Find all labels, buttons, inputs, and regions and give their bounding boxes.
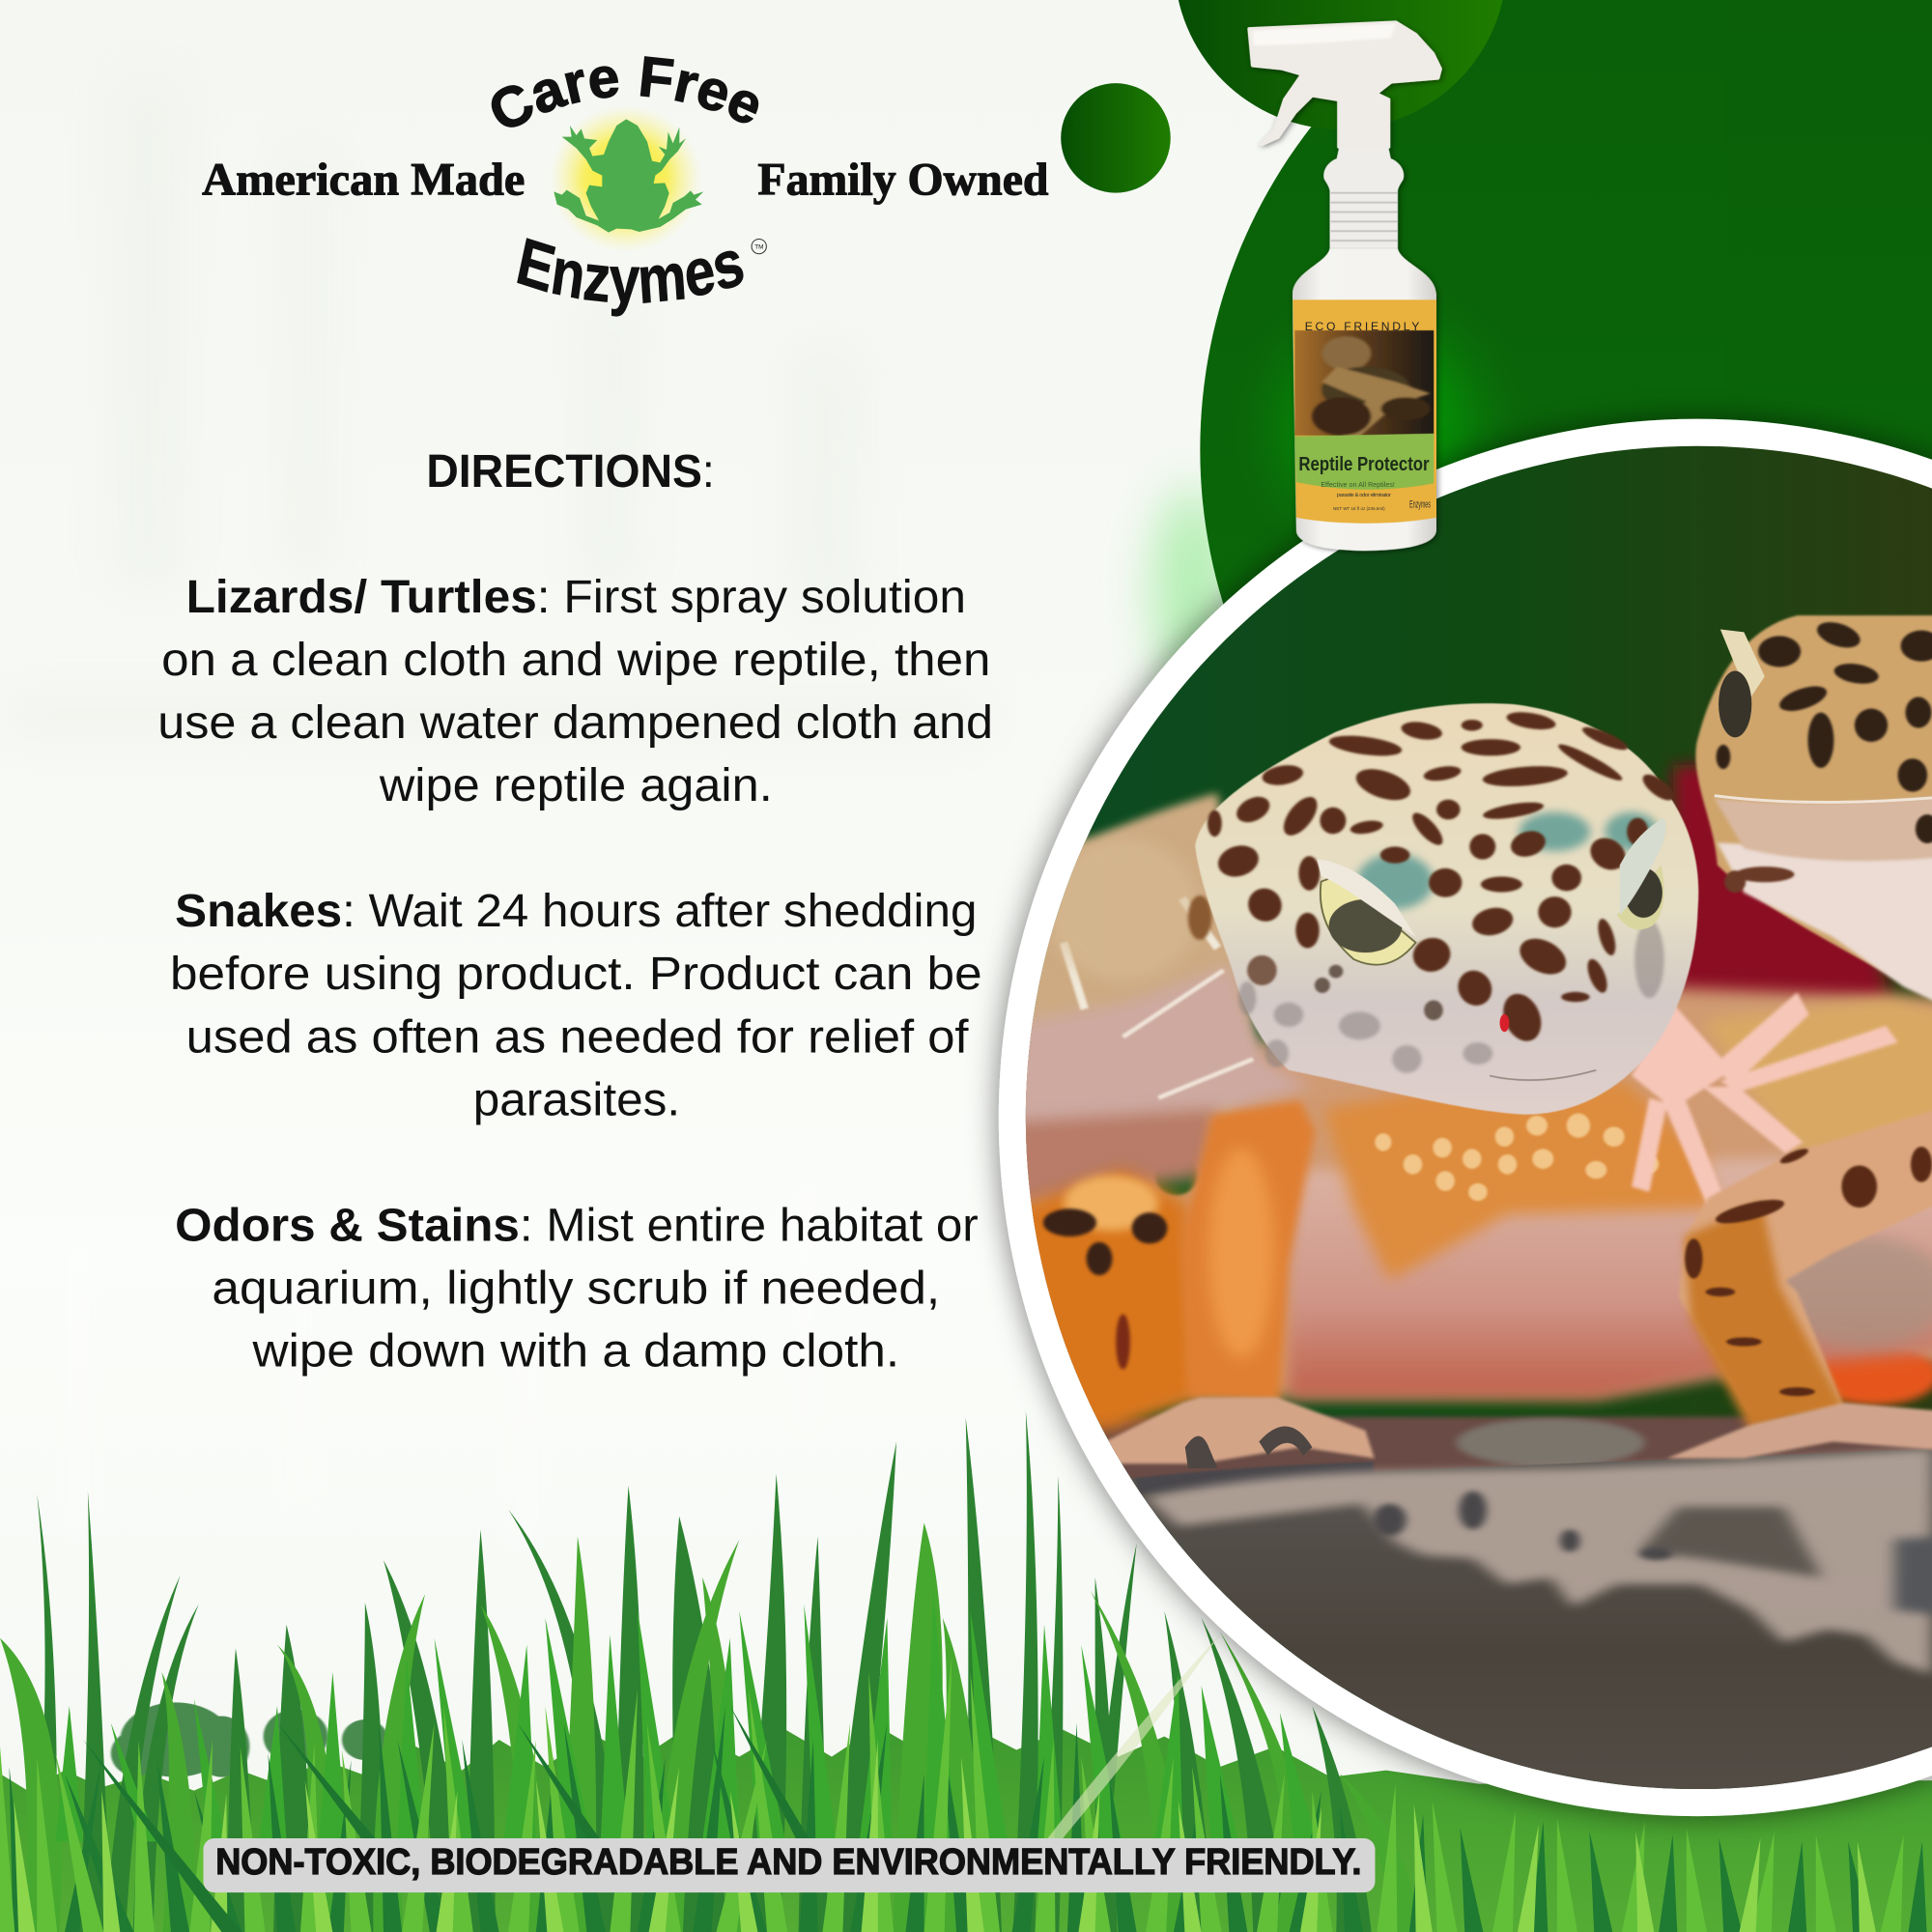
label: reptile protector: Reptile Protector bbox=[1298, 454, 1430, 475]
front left leg bbox=[1105, 1100, 1375, 1468]
second gecko head bbox=[1695, 615, 1932, 1020]
green glow near bottle bbox=[1226, 271, 1534, 579]
mid blades bbox=[0, 1523, 1417, 1932]
small green gap bbox=[1155, 1155, 1198, 1196]
gecko belly bbox=[1289, 1153, 1932, 1397]
icon: green frog bbox=[554, 119, 703, 233]
callout text: NON-TOXIC, BIODEGRADABLE AND ENVIRONMENTALLY FRIENDLY. bbox=[215, 1841, 1361, 1883]
diagonal dark leaves bbox=[83, 1706, 841, 1932]
text: American Made: American Made bbox=[202, 156, 525, 206]
green curved background shape bbox=[1200, 0, 1932, 985]
text: snakes: parasites. bbox=[473, 1073, 680, 1125]
text: snakes: Snakes: Wait 24 hours after shedding bbox=[175, 885, 977, 937]
trademark mark: TM bbox=[754, 244, 763, 251]
main gecko head bbox=[1195, 703, 1698, 1115]
label: eco friendly: ECO FRIENDLY bbox=[1305, 320, 1419, 333]
label: net weight: NET WT 16 fl oz (236.5ml) bbox=[1333, 506, 1385, 511]
text: odors and stains: wipe down with a damp cloth. bbox=[251, 1325, 899, 1378]
logo yellow glow bbox=[550, 104, 702, 252]
heading: directions: DIRECTIONS: bbox=[426, 445, 715, 497]
label: parasite and odor eliminator: parasite & odor eliminator bbox=[1337, 493, 1391, 498]
pale foreground leaf bbox=[1047, 1636, 1219, 1838]
product: spray bottle bbox=[1249, 22, 1440, 551]
text: odors and stains: aquarium, lightly scrub if needed, bbox=[212, 1262, 940, 1314]
lime blades bbox=[14, 1740, 1876, 1932]
label: effective on all reptiles: Effective on All Reptiles! bbox=[1321, 482, 1395, 489]
mouth and nostril bbox=[1490, 1070, 1596, 1080]
text: lizards and turtles: on a clean cloth and wipe reptile, then bbox=[161, 634, 991, 686]
bottle body bbox=[1293, 248, 1436, 551]
photo: leopard geckos on rock bbox=[1026, 446, 1932, 1789]
trademark mark bbox=[752, 239, 766, 254]
head teal markings bbox=[1356, 812, 1659, 909]
logo: Care Free Enzymes bbox=[491, 56, 767, 317]
dark streak blades bbox=[10, 1706, 1927, 1932]
bottle collar bbox=[1323, 147, 1404, 248]
text: snakes: used as often as needed for relief of bbox=[186, 1010, 969, 1063]
head lower grey mottling bbox=[1238, 921, 1664, 1073]
bottle label bbox=[1293, 299, 1436, 524]
back blades bbox=[32, 1411, 1372, 1932]
red backdrop bbox=[1673, 765, 1891, 1009]
bottle neck ribs bbox=[1331, 193, 1398, 241]
glow behind green shape bbox=[1153, 487, 1233, 696]
right flank spots bbox=[1703, 998, 1932, 1153]
head brown spots bbox=[1208, 709, 1678, 1046]
rock body bbox=[1035, 1449, 1932, 1855]
bright blades bbox=[0, 1655, 1904, 1932]
bottle trigger head bbox=[1249, 22, 1440, 147]
left eye bbox=[1317, 860, 1416, 965]
rock bbox=[1035, 1417, 1932, 1855]
white ring around photo bbox=[999, 419, 1932, 1816]
infographic canvas: Enzymes bbox=[1409, 499, 1431, 511]
small green circle bbox=[1061, 83, 1171, 193]
slender upper blades bbox=[55, 1591, 1317, 1841]
grass base bbox=[0, 1726, 1932, 1932]
top green circle bbox=[1175, 0, 1507, 129]
dark speckled stone bbox=[1135, 1462, 1373, 1494]
text: lizards and turtles bbox=[157, 571, 993, 811]
rock light crust bbox=[1146, 1449, 1932, 1674]
logo text: Care Free bbox=[502, 96, 777, 140]
text: Family Owned: Family Owned bbox=[757, 156, 1048, 206]
text: snakes: before using product. Product can be bbox=[170, 948, 982, 1000]
gecko body left bbox=[969, 793, 1312, 1214]
spotted orange back bbox=[1324, 1081, 1715, 1281]
label green band bbox=[1294, 434, 1434, 490]
logo: Care Free Enzymes: Care Free bbox=[491, 56, 759, 128]
callout: eco claim pill bbox=[203, 1838, 1375, 1892]
distant trees bbox=[111, 1702, 388, 1777]
text: lizards and turtles: wipe reptile again. bbox=[379, 759, 773, 811]
directions text block bbox=[157, 445, 993, 1378]
text: odors and stains: Odors & Stains: Mist entire habitat or bbox=[175, 1199, 979, 1251]
bottle label text bbox=[1298, 320, 1431, 511]
text: lizards and turtles: Lizards/ Turtles: First spray solution bbox=[186, 571, 966, 623]
pink front foot bbox=[1632, 992, 1898, 1208]
text: lizards and turtles: use a clean water dampened cloth and bbox=[157, 696, 993, 749]
label photo bbox=[1294, 330, 1434, 436]
right leg bbox=[1667, 1097, 1932, 1459]
grass field bbox=[0, 1411, 1932, 1932]
text: odors and stains bbox=[175, 1199, 979, 1378]
rear left leg bbox=[969, 1170, 1200, 1431]
rock upper brown bbox=[1095, 1417, 1932, 1488]
photo backdrop bbox=[1010, 431, 1932, 1811]
right eye bbox=[1617, 818, 1665, 929]
rock dark pockets bbox=[1639, 1507, 1822, 1577]
logo text: Enzymes: Enzymes bbox=[517, 238, 744, 317]
label lizard bbox=[1312, 336, 1431, 440]
body underlay bbox=[969, 987, 1932, 1431]
text: snakes bbox=[170, 885, 982, 1125]
